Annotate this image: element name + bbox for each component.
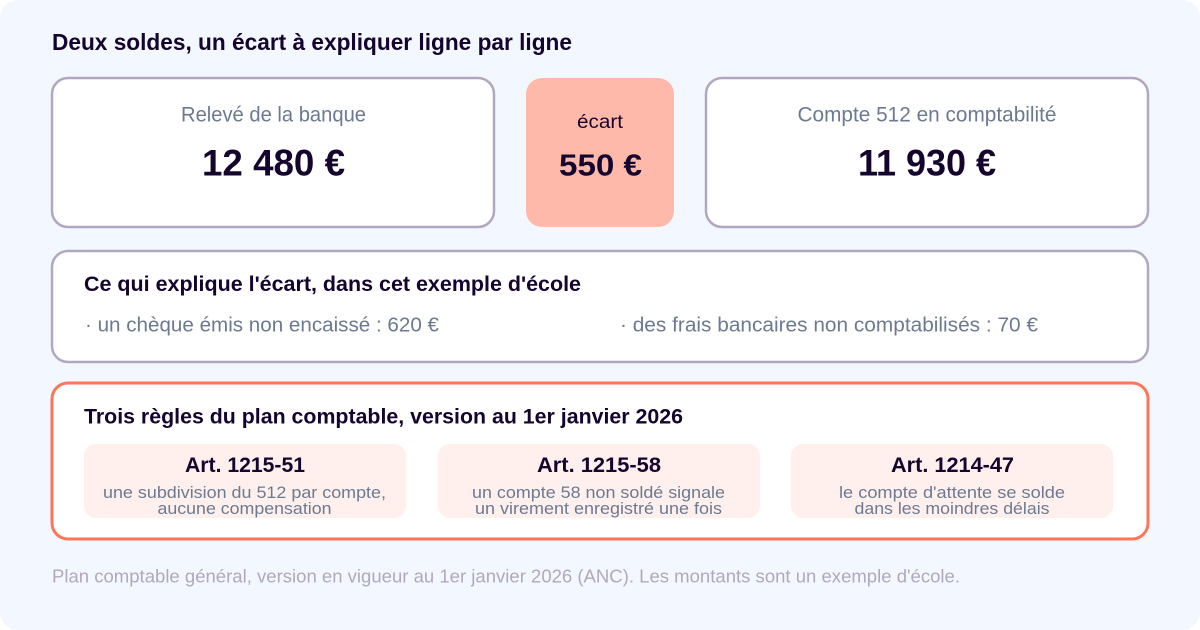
article description: aucune compensation xyxy=(158,499,332,518)
title: Deux soldes, un écart à expliquer ligne par ligne xyxy=(52,29,572,55)
panel: explanation xyxy=(52,251,1148,362)
article description: dans les moindres délais xyxy=(854,499,1050,518)
article description: un compte 58 non soldé signale xyxy=(472,483,725,502)
panel: bank statement xyxy=(52,78,494,227)
article description: un virement enregistré une fois xyxy=(475,499,722,518)
panel: gap xyxy=(526,78,674,227)
text: bank fees: · des frais bancaires non comptabilisés : 70 € xyxy=(620,314,1038,336)
value: account balance: 11 930 € xyxy=(858,142,996,184)
article description: le compte d'attente se solde xyxy=(839,483,1065,502)
footer source note: Plan comptable général, version en vigueur au 1er janvier 2026 (ANC). Les montants sont un exemple d'école. xyxy=(52,566,960,586)
value: gap amount: 550 € xyxy=(559,148,642,182)
article title: Art. 1215-51 xyxy=(185,454,305,477)
panel: account 512 xyxy=(706,78,1148,227)
label: gap: écart xyxy=(577,112,624,133)
label: account 512: Compte 512 en comptabilité xyxy=(798,104,1056,126)
card: article 1214-47 xyxy=(791,444,1113,518)
card: article 1215-58 xyxy=(438,444,760,518)
heading: rules: Trois règles du plan comptable, version au 1er janvier 2026 xyxy=(84,406,683,428)
label: bank statement: Relevé de la banque xyxy=(181,104,366,126)
panel: rules xyxy=(52,383,1148,539)
article title: Art. 1214-47 xyxy=(891,454,1014,477)
article description: une subdivision du 512 par compte, xyxy=(103,483,386,502)
text: uncashed cheque: · un chèque émis non encaissé : 620 € xyxy=(85,314,439,336)
heading: explanation: Ce qui explique l'écart, dans cet exemple d'école xyxy=(84,273,581,296)
value: bank balance: 12 480 € xyxy=(202,142,345,184)
card: article 1215-51 xyxy=(84,444,406,518)
article title: Art. 1215-58 xyxy=(537,454,661,477)
